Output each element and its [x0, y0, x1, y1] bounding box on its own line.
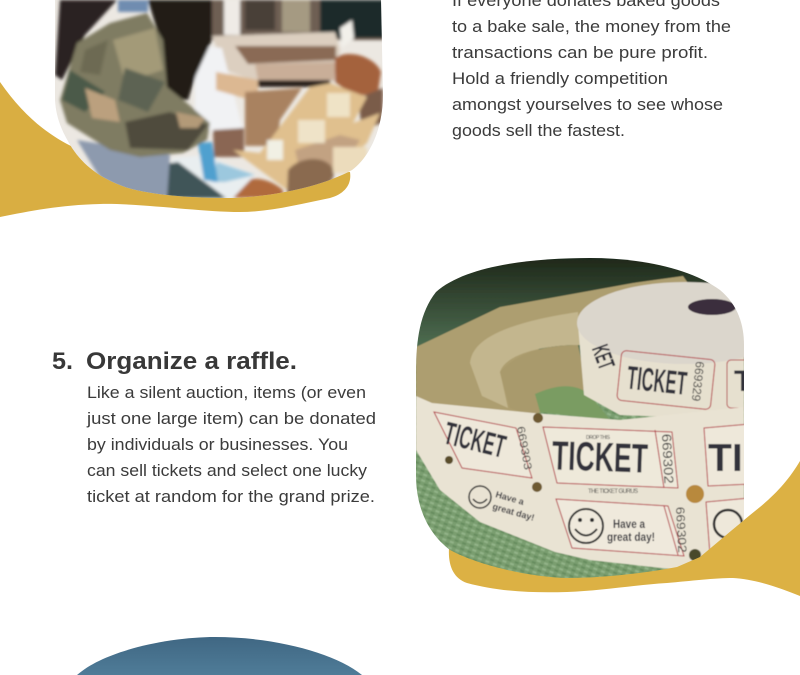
photo: main ticket [543, 427, 678, 488]
section text: bake sale: amongst yourselves to see whose [452, 96, 723, 114]
photo: lower main ticket [556, 499, 684, 556]
section text: bake sale: transactions can be pure profit. [452, 44, 708, 62]
photo: grey skirt [77, 140, 170, 198]
photo: bread loaves on shelf [212, 32, 340, 82]
photo: raffle ticket roll: DROP THIS [586, 435, 611, 441]
decorative gold blob behind bake sale photo [0, 82, 350, 217]
photo background: shop interior [205, 0, 385, 40]
photo: table and blue gloves [165, 155, 255, 198]
section text: bake sale: Hold a friendly competition [452, 70, 668, 88]
photo: raffle ticket roll: great day! [491, 501, 536, 523]
text block: raffle description: ticket at random for the grand prize. [87, 488, 375, 506]
photo: wooden crates [216, 72, 258, 102]
photo: next section, sky at top of blob [70, 635, 370, 675]
text block: raffle description: just one large item) can be donated [86, 410, 376, 428]
text block: raffle description: Like a silent auction, items (or even [87, 384, 366, 402]
photo: raffle ticket roll: TICKET [551, 432, 649, 482]
photo: raffle ticket roll: Have a [494, 489, 526, 507]
text block: raffle description: can sell tickets and select one lucky [87, 462, 368, 480]
photo: white bag [195, 45, 243, 135]
photo: raffle ticket roll: TICKET [625, 359, 689, 402]
photo: raffle ticket roll: TI [708, 437, 743, 480]
photo: raffle ticket roll: great day! [607, 530, 655, 544]
photo: raffle ticket roll: Have a [613, 517, 645, 531]
photo: ticket roll [578, 325, 744, 420]
section text: bake sale: to a bake sale, the money from the [452, 18, 731, 36]
photo: raffle ticket roll: 669302 [673, 506, 689, 553]
photo: raffle ticket roll: 669303 [514, 425, 534, 471]
photo: raffle ticket roll: TICKET [441, 415, 510, 465]
photo: raffle ticket roll: THE TICKET GURUS [588, 489, 638, 495]
photo: bake sale stall [50, 0, 390, 200]
photo: raffle ticket roll: 669302 [659, 433, 677, 484]
decorative gold blob behind ticket photo [449, 461, 800, 596]
heading: 5. Organize a raffle: 5. [52, 348, 73, 375]
photo: raffle ticket roll: KET [586, 341, 620, 373]
photo: hair [55, 0, 117, 80]
photo background: dark green [417, 258, 710, 356]
section text: bake sale: goods sell the fastest. [452, 122, 625, 140]
photo: raffle ticket roll: 669329 [689, 361, 707, 402]
photo: raffle ticket roll: T [734, 365, 752, 398]
heading: 5. Organize a raffle: Organize a raffle. [86, 348, 297, 375]
photo: camouflage jacket [60, 13, 210, 157]
photo: left ticket [434, 412, 532, 478]
photo: back paper strip [416, 276, 700, 415]
section text: bake sale [452, 0, 731, 140]
text block: raffle description: by individuals or businesses. You [87, 436, 348, 454]
photo: front ticket strip [416, 396, 744, 570]
photo: raffle ticket roll [416, 258, 744, 578]
text block: raffle description [86, 384, 376, 506]
photo: right ticket [704, 424, 750, 486]
